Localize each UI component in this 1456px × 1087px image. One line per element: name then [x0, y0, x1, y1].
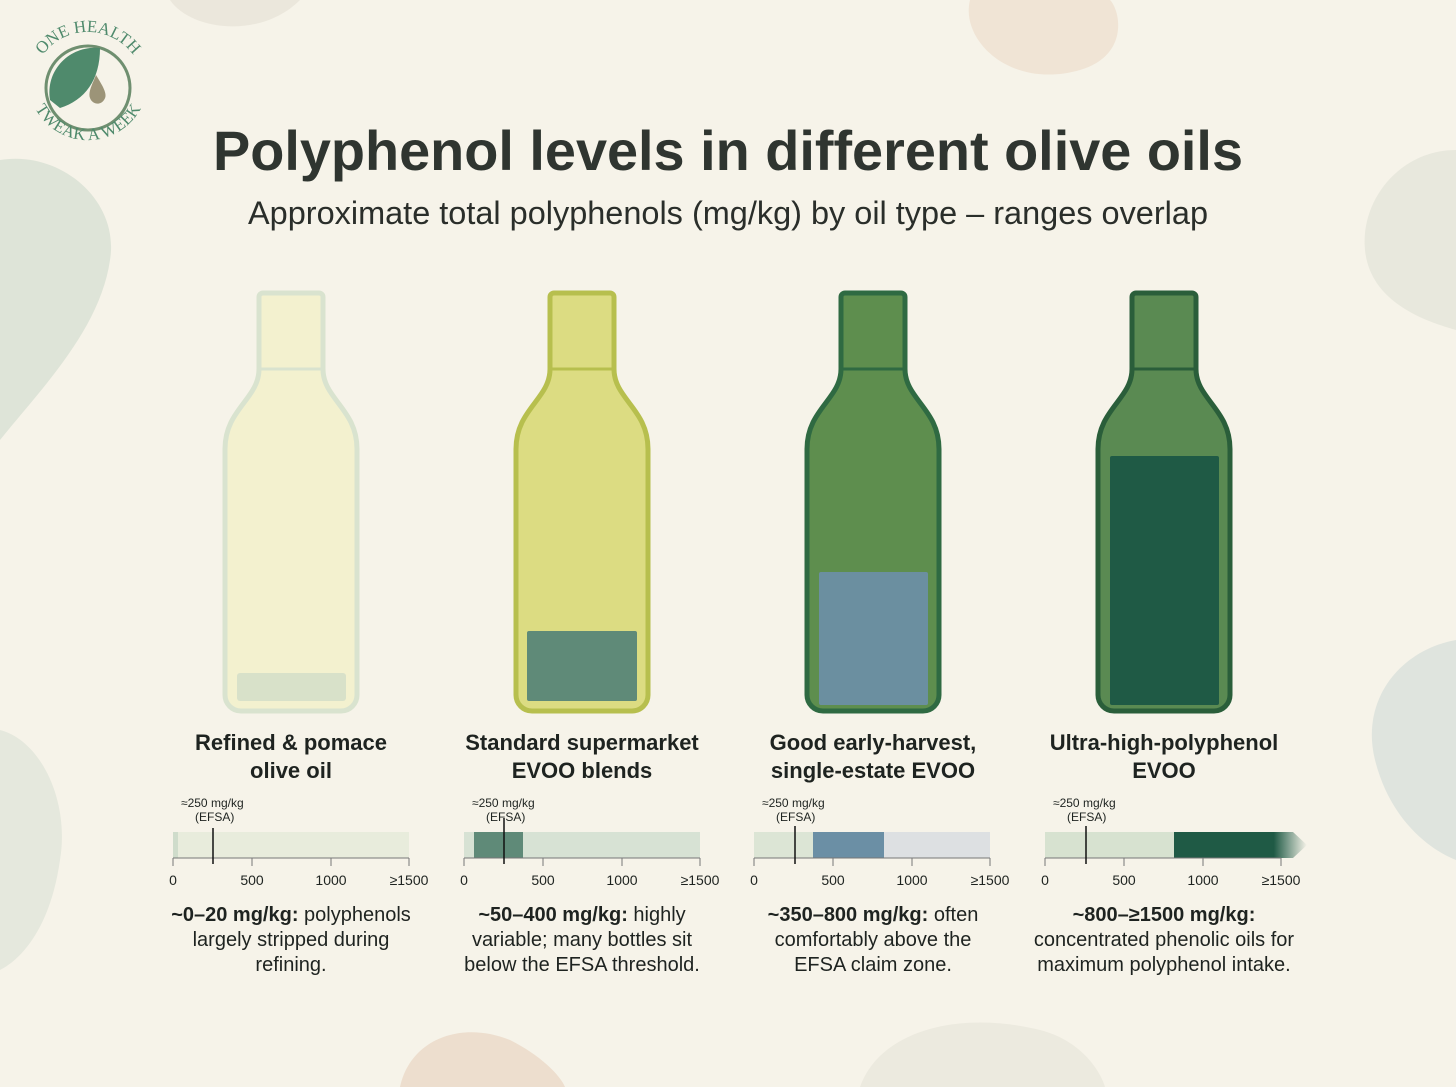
- bar chart: (EFSA): [776, 810, 815, 824]
- bar chart: 500: [1112, 872, 1136, 888]
- description: largely stripped during: [193, 929, 389, 951]
- bar chart: 500: [821, 872, 845, 888]
- heading: Good early-harvest,: [770, 730, 976, 755]
- description: [768, 904, 978, 976]
- description: refining.: [255, 954, 327, 976]
- bar chart: 1000: [1187, 872, 1219, 888]
- bar chart: 0: [460, 872, 468, 888]
- description: ~50–400 mg/kg: highly: [478, 904, 686, 926]
- heading: Standard supermarket: [465, 730, 699, 755]
- description: [464, 904, 700, 976]
- bar chart: ≥1500: [971, 872, 1010, 888]
- description: comfortably above the: [775, 929, 971, 951]
- subtitle: Approximate total polyphenols (mg/kg) by oil type – ranges overlap: [248, 195, 1208, 231]
- title: Polyphenol levels in different olive oils: [213, 119, 1243, 182]
- bar chart: (EFSA): [486, 810, 525, 824]
- panel: early-harvest: single-estate EVOO: [771, 758, 975, 783]
- bar chart: [460, 796, 720, 888]
- logo: [36, 20, 142, 140]
- bar chart: 1000: [315, 872, 347, 888]
- panel: supermarket: EVOO blends: [512, 758, 652, 783]
- bar chart: 500: [240, 872, 264, 888]
- description: ~350–800 mg/kg: often: [768, 904, 978, 926]
- bar chart: [169, 796, 429, 888]
- panel: refined: [169, 730, 429, 976]
- panel: supermarket: [460, 730, 720, 976]
- panel: early-harvest: [750, 730, 1010, 976]
- heading: Ultra-high-polyphenol: [1050, 730, 1278, 755]
- bottle: ultra-high: [1098, 293, 1230, 711]
- logo: TWEAK A WEEK: [36, 102, 141, 140]
- bar chart: 1000: [896, 872, 928, 888]
- logo: ONE HEALTH: [36, 20, 142, 55]
- description: variable; many bottles sit: [472, 929, 692, 951]
- description: [1034, 904, 1294, 976]
- bottle: refined: [225, 293, 357, 711]
- bar chart: 0: [750, 872, 758, 888]
- description: below the EFSA threshold.: [464, 954, 700, 976]
- bottle: early-harvest: [807, 293, 939, 711]
- bar chart: ≈250 mg/kg: [472, 796, 535, 810]
- description: ~800–≥1500 mg/kg:: [1073, 904, 1255, 926]
- bar chart: ≈250 mg/kg: [762, 796, 825, 810]
- bar chart: ≥1500: [390, 872, 429, 888]
- bar chart: 500: [531, 872, 555, 888]
- bar chart: (EFSA): [195, 810, 234, 824]
- bar chart: ≥1500: [1262, 872, 1301, 888]
- bar chart: 1000: [606, 872, 638, 888]
- bar chart: 0: [1041, 872, 1049, 888]
- bar chart: ≥1500: [681, 872, 720, 888]
- heading: Refined & pomace: [195, 730, 387, 755]
- bar chart: [750, 796, 1010, 888]
- description: [171, 904, 411, 976]
- description: concentrated phenolic oils for: [1034, 929, 1294, 951]
- bar chart: ≈250 mg/kg: [1053, 796, 1116, 810]
- description: maximum polyphenol intake.: [1037, 954, 1291, 976]
- description: ~0–20 mg/kg: polyphenols: [171, 904, 411, 926]
- panel: refined: olive oil: [250, 758, 332, 783]
- bar chart: 0: [169, 872, 177, 888]
- panel: ultra-high: EVOO: [1132, 758, 1196, 783]
- bottle: supermarket: [516, 293, 648, 711]
- panel: ultra-high: [1034, 730, 1307, 976]
- bar chart: ≈250 mg/kg: [181, 796, 244, 810]
- description: EFSA claim zone.: [794, 954, 952, 976]
- bar chart: (EFSA): [1067, 810, 1106, 824]
- bar chart: [1041, 796, 1307, 888]
